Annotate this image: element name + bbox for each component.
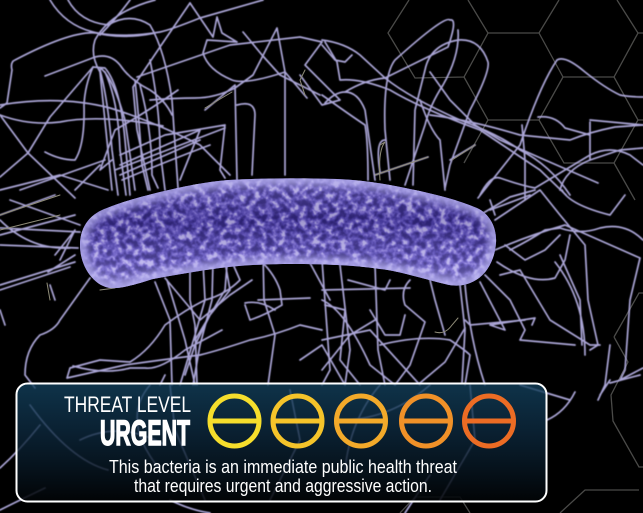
hexagon grid pattern <box>388 0 643 513</box>
description text: This bacteria is an immediate public health threat <box>109 457 457 477</box>
icon: threat level indicators <box>210 396 514 446</box>
indicator 1 <box>210 396 259 446</box>
panel background <box>16 384 546 502</box>
indicator 5 <box>464 396 514 446</box>
bacterium body <box>80 178 496 288</box>
brown-grey thin filaments <box>0 70 475 333</box>
panel: threat level <box>16 384 546 502</box>
description text: that requires urgent and aggressive action. <box>134 476 432 496</box>
description text <box>109 457 457 496</box>
indicator 4 <box>402 396 450 446</box>
indicator 2 <box>273 396 322 446</box>
indicator 3 <box>336 396 386 446</box>
heading: urgent: URGENT <box>100 414 190 453</box>
textured surface <box>80 178 496 288</box>
heading: threat level: THREAT LEVEL <box>64 392 191 417</box>
